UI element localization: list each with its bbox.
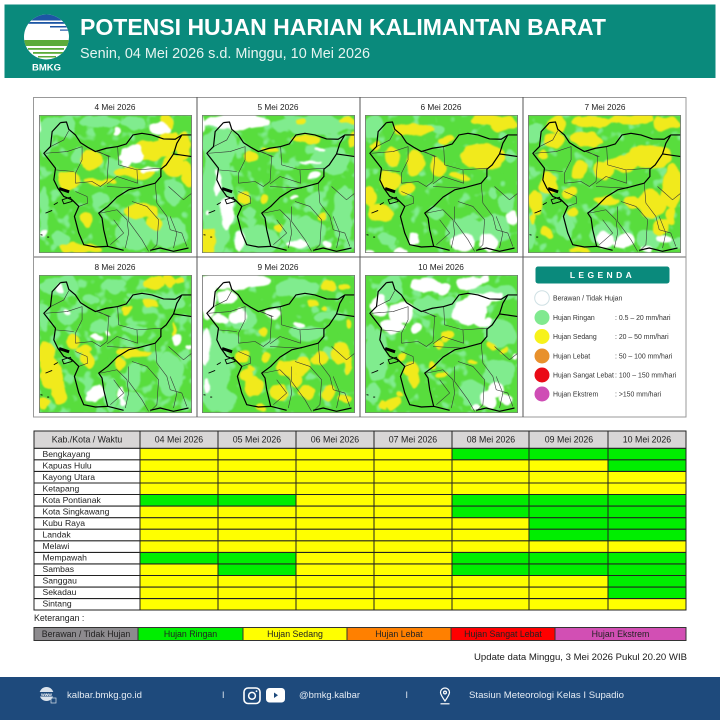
table header row: 09 Mei 2026 (545, 434, 593, 444)
icon: youtube (266, 688, 285, 702)
map panel: 10 Mei 2026: 10 Mei 2026 (418, 262, 464, 272)
row labels: Kapuas Hulu (42, 460, 92, 470)
map panel: 9 Mei 2026: 9 Mei 2026 (257, 262, 299, 272)
map panel: 10 Mei 2026 (365, 262, 518, 413)
row labels: Mempawah (42, 552, 87, 562)
title: POTENSI HUJAN HARIAN KALIMANTAN BARAT (80, 14, 606, 40)
legend heading: LEGENDA (570, 270, 635, 280)
website address: kalbar.bmkg.go.id (67, 690, 142, 700)
map panel: 7 Mei 2026: 7 Mei 2026 (584, 102, 626, 112)
table header row: 08 Mei 2026 (467, 434, 515, 444)
row labels: Sintang (42, 598, 72, 608)
category key strip: Berawan / Tidak Hujan (42, 629, 130, 639)
legend: hujan sedang (534, 329, 669, 344)
legend: hujan ekstrem: : >150 mm/hari (615, 392, 662, 398)
category key strip: Hujan Sangat Lebat (464, 629, 542, 639)
forecast cells (140, 448, 686, 610)
row labels: Melawi (42, 541, 69, 551)
legend: hujan sedang: : 20 – 50 mm/hari (615, 334, 669, 341)
category key strip: Hujan Sedang (267, 629, 323, 639)
map panel: 8 Mei 2026: 8 Mei 2026 (94, 262, 136, 272)
legend: hujan sedang: Hujan Sedang (553, 334, 597, 341)
legend: hujan sangat lebat: Hujan Sangat Lebat (553, 372, 614, 380)
map panel: 4 Mei 2026 (37, 102, 193, 253)
legend: hujan ringan (534, 310, 671, 325)
map panel: 4 Mei 2026: 4 Mei 2026 (94, 102, 136, 112)
icon: instagram (244, 688, 260, 704)
table header row: Kab./Kota / Waktu (52, 434, 122, 444)
panel frame grid (33, 97, 686, 417)
station name: Stasiun Meteorologi Kelas I Supadio (469, 690, 624, 700)
legend: hujan ekstrem: Hujan Ekstrem (553, 392, 598, 398)
date range subtitle: Senin, 04 Mei 2026 s.d. Minggu, 10 Mei 2026 (80, 46, 370, 62)
row labels: Sanggau (42, 576, 77, 586)
legend: berawan (535, 291, 622, 305)
panel: legenda (534, 266, 677, 402)
keterangan label: Keterangan : (34, 613, 84, 623)
legend: hujan ringan: : 0.5 – 20 mm/hari (615, 315, 671, 322)
header banner (4, 4, 716, 78)
legend heading (536, 266, 670, 284)
separator: I (222, 690, 224, 700)
separator: I (406, 690, 408, 700)
legend: hujan ekstrem (534, 386, 662, 402)
footer bar (0, 677, 720, 720)
icon: website: www (40, 692, 52, 697)
table: potensi hujan per kabupaten (34, 431, 686, 610)
map panel: 6 Mei 2026 (363, 102, 519, 254)
row labels: Bengkayang (42, 449, 91, 459)
row labels: Ketapang (42, 484, 80, 494)
table grid (34, 431, 686, 610)
legend: hujan ringan: Hujan Ringan (553, 315, 595, 322)
update timestamp: Update data Minggu, 3 Mei 2026 Pukul 20.20 WIB (474, 652, 687, 662)
table header row: 07 Mei 2026 (389, 434, 437, 444)
row labels: Landak (42, 530, 71, 540)
table header row: 10 Mei 2026 (623, 434, 671, 444)
row labels (42, 449, 110, 608)
row labels: Sambas (42, 564, 74, 574)
legend: hujan lebat (534, 348, 673, 364)
map panel: 5 Mei 2026: 5 Mei 2026 (257, 102, 299, 112)
map panel: 6 Mei 2026: 6 Mei 2026 (420, 102, 462, 112)
legend: hujan lebat: : 50 – 100 mm/hari (615, 354, 673, 360)
table header row: 06 Mei 2026 (311, 434, 359, 444)
row labels: Kota Pontianak (42, 495, 101, 505)
legend: hujan sangat lebat: : 100 – 150 mm/hari (615, 372, 677, 380)
table header row: 05 Mei 2026 (233, 434, 281, 444)
map panel: 7 Mei 2026 (527, 102, 682, 253)
category key strip: Hujan Ekstrem (592, 629, 649, 639)
legend: berawan: Berawan / Tidak Hujan (553, 296, 622, 302)
table header row: 04 Mei 2026 (155, 434, 203, 444)
map panel: 9 Mei 2026 (189, 262, 355, 413)
legend: hujan lebat: Hujan Lebat (553, 354, 590, 360)
map panel: 8 Mei 2026 (38, 262, 192, 416)
row labels: Kota Singkawang (42, 506, 110, 516)
legend: hujan sangat lebat (534, 368, 677, 382)
icon: website (38, 687, 56, 703)
icon: BMKG logo: BMKG (32, 62, 61, 74)
row labels: Kubu Raya (42, 518, 85, 528)
social handle: @bmkg.kalbar (299, 690, 360, 700)
map panel: 5 Mei 2026 (199, 102, 356, 256)
category key strip: Hujan Lebat (375, 629, 423, 639)
table header row (34, 431, 686, 448)
row labels: Sekadau (42, 587, 77, 597)
category key strip: Hujan Ringan (164, 629, 217, 639)
category key strip (34, 627, 686, 641)
icon: location pin (440, 688, 450, 704)
row labels: Kayong Utara (42, 472, 95, 482)
icon: BMKG logo (24, 14, 70, 74)
